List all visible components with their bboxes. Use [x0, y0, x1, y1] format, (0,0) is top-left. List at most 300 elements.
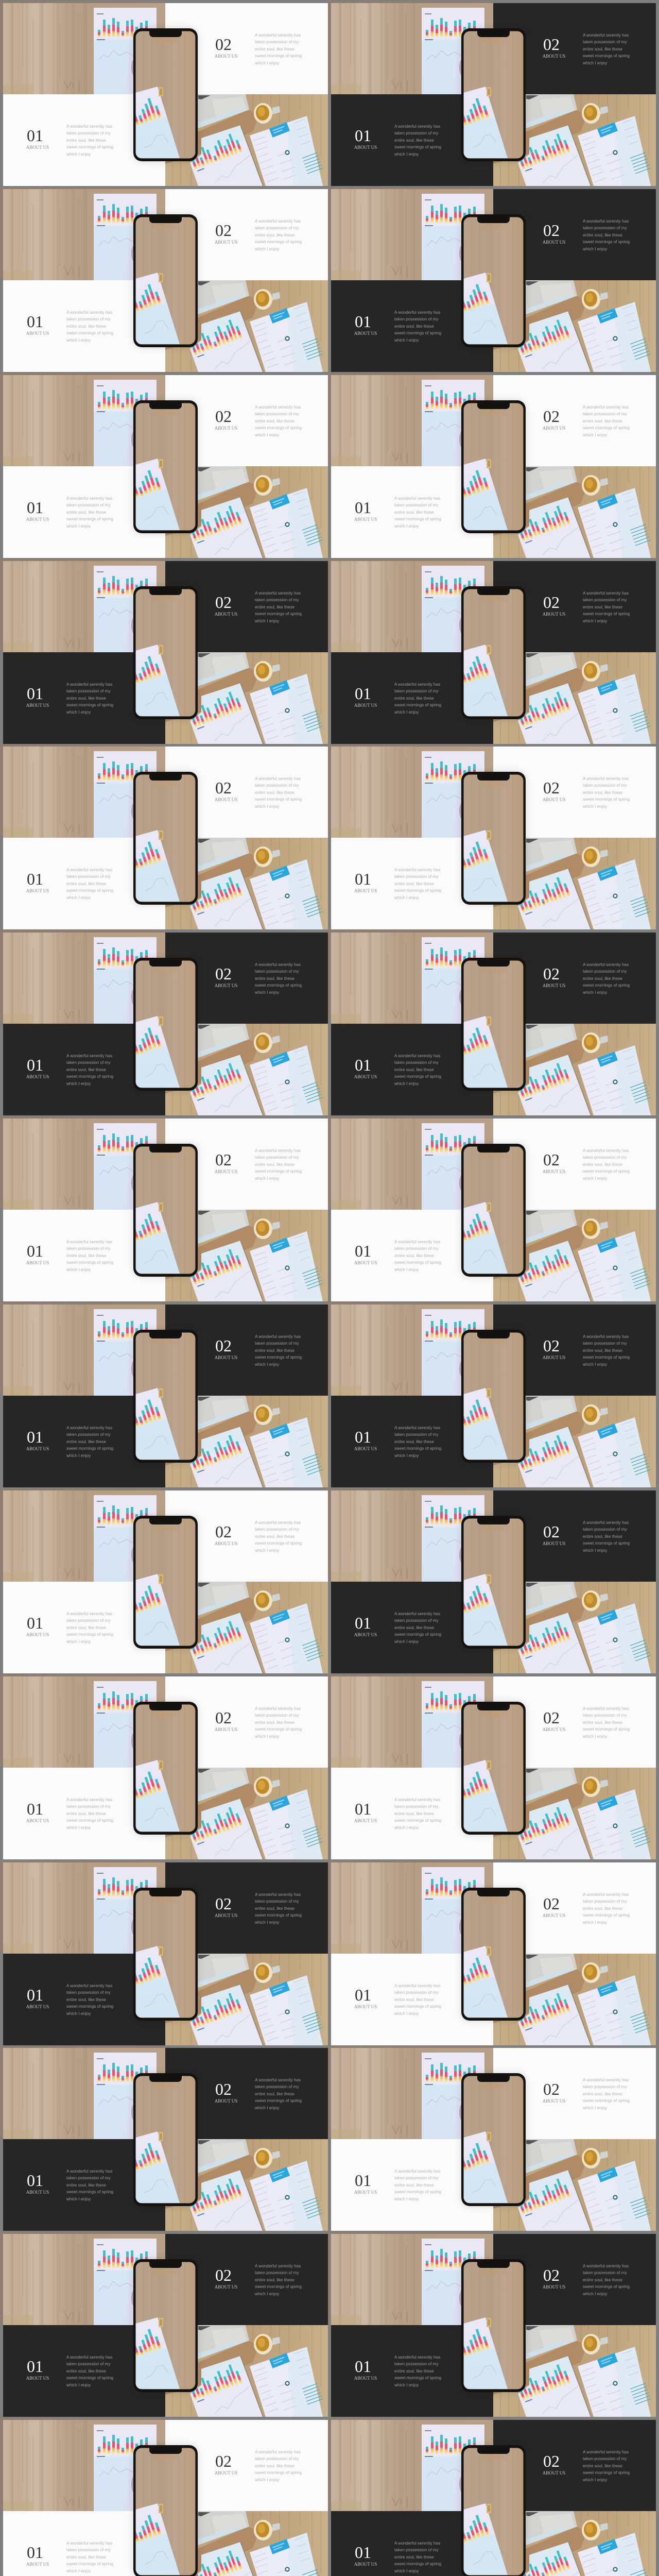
body text: entire soul, like these [583, 605, 622, 609]
number: 01 [27, 1428, 43, 1446]
body text: A wonderful serenity has [583, 405, 629, 410]
photo: desk wood and paper [3, 1118, 165, 1210]
body text: A wonderful serenity has [66, 2169, 112, 2174]
slide row 9 right [331, 1490, 656, 1673]
number: 02 [215, 1336, 232, 1355]
body text: entire soul, like these [394, 324, 434, 329]
body text: taken possession of my [66, 1432, 111, 1437]
label: ABOUT US [354, 2004, 377, 2009]
panel: about us 02 [493, 561, 656, 652]
body text: sweet mornings of spring [394, 1260, 441, 1265]
body text: which I enjoy [66, 2197, 91, 2201]
body text: entire soul, like these [66, 1253, 106, 1258]
body text: entire soul, like these [394, 1439, 434, 1444]
body text: taken possession of my [583, 1899, 627, 1904]
photo: desk laptop coffee papers [165, 1954, 328, 2045]
panel: about us 02 [165, 3, 328, 94]
body text: which I enjoy [255, 2478, 279, 2482]
body text: entire soul, like these [583, 1348, 622, 1353]
body text: sweet mornings of spring [583, 1913, 630, 1918]
body text: sweet mornings of spring [66, 2190, 113, 2194]
phone mockup [461, 1888, 526, 2021]
body text: A wonderful serenity has [583, 1706, 629, 1711]
body text: A wonderful serenity has [394, 2169, 440, 2174]
body text: entire soul, like these [583, 2464, 622, 2468]
body text [66, 310, 113, 343]
label: ABOUT US [543, 612, 565, 617]
photo: desk wood and paper [331, 2048, 493, 2139]
body text: A wonderful serenity has [394, 1798, 440, 1802]
photo: desk laptop coffee papers [493, 2325, 656, 2417]
body text: entire soul, like these [583, 233, 622, 238]
body text: sweet mornings of spring [583, 54, 630, 58]
photo: desk wood and paper [3, 3, 165, 94]
number: 01 [27, 870, 43, 888]
panel: about us 01 [3, 1024, 165, 1115]
body text [583, 2263, 630, 2297]
phone mockup [461, 28, 526, 161]
body text: taken possession of my [66, 2176, 111, 2180]
body text: which I enjoy [394, 1267, 419, 1272]
body text: which I enjoy [255, 804, 279, 809]
photo: desk laptop coffee papers [165, 2325, 328, 2417]
phone mockup [133, 2259, 198, 2392]
number: 02 [543, 1708, 560, 1727]
photo: desk laptop coffee papers [493, 838, 656, 929]
slide row 5 right [331, 747, 656, 929]
body text: sweet mornings of spring [66, 517, 113, 521]
body text: sweet mornings of spring [394, 2562, 441, 2566]
label: ABOUT US [215, 797, 237, 802]
body text: sweet mornings of spring [66, 2376, 113, 2380]
label: ABOUT US [26, 1446, 49, 1451]
phone mockup [133, 958, 198, 1091]
label: ABOUT US [215, 426, 237, 431]
number: 02 [215, 2452, 232, 2470]
body text: A wonderful serenity has [255, 1706, 301, 1711]
label: ABOUT US [543, 2470, 565, 2476]
body text: sweet mornings of spring [394, 2376, 441, 2380]
body text: entire soul, like these [255, 2278, 294, 2282]
body text: which I enjoy [583, 247, 607, 251]
photo: desk wood and paper [3, 1676, 165, 1768]
panel: about us 01 [331, 280, 493, 372]
panel: about us 02 [493, 2234, 656, 2325]
panel: about us 01 [3, 2139, 165, 2231]
photo: desk laptop coffee papers [165, 838, 328, 929]
label: ABOUT US [215, 240, 237, 245]
body text: sweet mornings of spring [66, 2562, 113, 2566]
body text: taken possession of my [583, 2270, 627, 2275]
body text: which I enjoy [394, 710, 419, 715]
panel: about us 02 [165, 747, 328, 838]
phone mockup [133, 214, 198, 347]
panel: about us 02 [493, 1862, 656, 1954]
body text: entire soul, like these [583, 419, 622, 423]
body text: entire soul, like these [583, 1906, 622, 1911]
label: ABOUT US [26, 1074, 49, 1079]
body text: A wonderful serenity has [66, 1240, 112, 1244]
panel: about us 02 [165, 1676, 328, 1768]
body text: entire soul, like these [255, 1906, 294, 1911]
label: ABOUT US [354, 1260, 377, 1265]
number: 01 [355, 684, 371, 703]
label: ABOUT US [543, 240, 565, 245]
body text: entire soul, like these [394, 2555, 434, 2560]
number: 01 [27, 1614, 43, 1632]
body text: which I enjoy [255, 990, 279, 995]
body text: entire soul, like these [394, 1997, 434, 2002]
panel: about us 02 [493, 2420, 656, 2511]
body text: A wonderful serenity has [583, 591, 629, 596]
body text: sweet mornings of spring [255, 797, 302, 802]
body text: taken possession of my [394, 1246, 439, 1251]
number: 02 [543, 221, 560, 240]
label: ABOUT US [215, 1727, 237, 1732]
photo: desk laptop coffee papers [493, 280, 656, 372]
body text [255, 33, 302, 65]
number: 01 [27, 126, 43, 145]
body text: entire soul, like these [255, 976, 294, 981]
number: 01 [27, 1800, 43, 1818]
panel: about us 01 [331, 1396, 493, 1487]
slide row 4 left [0, 559, 328, 744]
body text: taken possession of my [394, 2548, 439, 2552]
photo: desk wood and paper [331, 375, 493, 466]
body text: entire soul, like these [255, 233, 294, 238]
body text: which I enjoy [394, 1453, 419, 1458]
phone mockup [461, 1702, 526, 1835]
label: ABOUT US [543, 1355, 565, 1360]
label: ABOUT US [26, 2004, 49, 2009]
body text: sweet mornings of spring [394, 145, 441, 149]
body text: sweet mornings of spring [255, 1727, 302, 1732]
photo: desk wood and paper [331, 2234, 493, 2325]
body text: A wonderful serenity has [66, 868, 112, 872]
phone mockup [461, 214, 526, 347]
photo: desk wood and paper [331, 1862, 493, 1954]
body text: entire soul, like these [394, 882, 434, 886]
body text: taken possession of my [394, 1804, 439, 1809]
label: ABOUT US [215, 612, 237, 617]
number: 02 [215, 1522, 232, 1541]
body text: A wonderful serenity has [394, 682, 440, 687]
body text: sweet mornings of spring [66, 1074, 113, 1079]
panel: about us 01 [331, 466, 493, 558]
body text: A wonderful serenity has [394, 2541, 440, 2546]
body text: which I enjoy [583, 990, 607, 995]
photo: desk laptop coffee papers [165, 1768, 328, 1859]
body text: A wonderful serenity has [255, 962, 301, 967]
slide row 11 right [331, 1862, 656, 2045]
photo: desk laptop coffee papers [493, 1024, 656, 1115]
label: ABOUT US [354, 1632, 377, 1637]
body text: A wonderful serenity has [66, 2355, 112, 2360]
panel: about us 01 [331, 1024, 493, 1115]
panel: about us 02 [493, 747, 656, 838]
number: 01 [355, 498, 371, 517]
number: 02 [215, 778, 232, 797]
panel: about us 01 [331, 1768, 493, 1859]
body text: entire soul, like these [66, 696, 106, 701]
photo: desk laptop coffee papers [493, 1768, 656, 1859]
photo: desk wood and paper [3, 2234, 165, 2325]
body text [583, 1891, 630, 1926]
body text: taken possession of my [394, 2362, 439, 2366]
body text: A wonderful serenity has [255, 1892, 301, 1897]
panel: about us 02 [493, 3, 656, 94]
body text: sweet mornings of spring [394, 1446, 441, 1451]
body text [255, 1333, 302, 1368]
body text [66, 496, 113, 529]
panel: about us 02 [493, 1304, 656, 1396]
body text: taken possession of my [66, 1618, 111, 1623]
body text: entire soul, like these [583, 47, 622, 52]
body text: sweet mornings of spring [66, 1260, 113, 1265]
body text: taken possession of my [66, 689, 111, 693]
photo: desk wood and paper [331, 1304, 493, 1396]
label: ABOUT US [543, 1541, 565, 1546]
body text: which I enjoy [66, 895, 91, 900]
body text: which I enjoy [66, 1081, 91, 1086]
body text: taken possession of my [255, 1155, 299, 1160]
panel: about us 01 [3, 838, 165, 929]
label: ABOUT US [354, 1074, 377, 1079]
body text: which I enjoy [255, 619, 279, 623]
body text [583, 1333, 630, 1368]
panel: about us 01 [331, 2139, 493, 2231]
body text: taken possession of my [66, 131, 111, 135]
body text: taken possession of my [66, 317, 111, 321]
body text [394, 1053, 441, 1087]
body text: taken possession of my [394, 689, 439, 693]
photo: desk wood and paper [3, 1862, 165, 1954]
body text: entire soul, like these [66, 882, 106, 886]
body text: entire soul, like these [66, 1625, 106, 1630]
body text [66, 1425, 113, 1459]
body text [583, 2449, 630, 2483]
body text: sweet mornings of spring [255, 2098, 302, 2103]
label: ABOUT US [354, 888, 377, 893]
body text: A wonderful serenity has [66, 310, 112, 315]
body text: sweet mornings of spring [66, 1632, 113, 1637]
body text: which I enjoy [394, 152, 419, 157]
body text: which I enjoy [394, 895, 419, 900]
body text [255, 591, 302, 623]
number: 02 [215, 1150, 232, 1169]
number: 02 [543, 2452, 560, 2470]
panel: about us 01 [3, 1954, 165, 2045]
number: 02 [543, 407, 560, 426]
body text: taken possession of my [255, 1527, 299, 1532]
body text: sweet mornings of spring [583, 2470, 630, 2475]
panel: about us 01 [3, 2325, 165, 2417]
panel: about us 02 [165, 1490, 328, 1582]
number: 01 [27, 498, 43, 517]
body text: entire soul, like these [583, 2092, 622, 2096]
body text: which I enjoy [255, 1548, 279, 1553]
panel: about us 01 [331, 1582, 493, 1673]
slide row 8 left [3, 1304, 328, 1487]
photo: desk laptop coffee papers [493, 1396, 656, 1487]
body text [583, 1519, 630, 1554]
body text [394, 496, 441, 529]
body text: sweet mornings of spring [255, 2284, 302, 2289]
phone mockup [133, 772, 198, 905]
body text: entire soul, like these [394, 1625, 434, 1630]
body text [255, 219, 302, 251]
panel: about us 01 [331, 2325, 493, 2417]
body text: taken possession of my [255, 1899, 299, 1904]
body text: A wonderful serenity has [255, 2264, 301, 2268]
body text: A wonderful serenity has [66, 1798, 112, 1802]
body text: which I enjoy [394, 524, 419, 529]
panel: about us 02 [165, 561, 328, 652]
body text [394, 1239, 441, 1273]
panel: about us 01 [3, 280, 165, 372]
slide row 6 left [3, 933, 328, 1115]
body text [583, 590, 630, 624]
body text [394, 867, 441, 901]
slide row 6 right [331, 933, 656, 1115]
label: ABOUT US [215, 2098, 237, 2104]
body text [255, 2077, 302, 2111]
panel: about us 01 [3, 94, 165, 186]
slide row 1 right [328, 1, 656, 186]
photo: desk laptop coffee papers [165, 94, 328, 186]
label: ABOUT US [26, 703, 49, 708]
body text: A wonderful serenity has [583, 776, 629, 781]
panel: about us 02 [165, 2048, 328, 2139]
body text: taken possession of my [66, 1060, 111, 1065]
body text [583, 1705, 630, 1740]
slide row 9 left [3, 1490, 328, 1673]
label: ABOUT US [26, 145, 49, 150]
body text: which I enjoy [66, 152, 91, 157]
label: ABOUT US [543, 426, 565, 431]
label: ABOUT US [354, 2562, 377, 2567]
body text: which I enjoy [583, 2478, 607, 2482]
label: ABOUT US [354, 1446, 377, 1451]
body text: which I enjoy [583, 804, 607, 809]
photo: desk wood and paper [331, 561, 493, 652]
label: ABOUT US [354, 1818, 377, 1823]
number: 01 [355, 312, 371, 331]
body text: sweet mornings of spring [66, 888, 113, 893]
body text [583, 219, 630, 251]
body text: taken possession of my [394, 2176, 439, 2180]
photo: desk wood and paper [3, 1490, 165, 1582]
body text [583, 33, 630, 65]
phone mockup [461, 2445, 526, 2576]
label: ABOUT US [26, 2376, 49, 2381]
phone mockup [133, 28, 198, 161]
body text: sweet mornings of spring [583, 1727, 630, 1732]
label: ABOUT US [215, 1355, 237, 1360]
panel: about us 01 [331, 652, 493, 744]
panel: about us 02 [493, 189, 656, 280]
body text: taken possession of my [394, 874, 439, 879]
label: ABOUT US [543, 1169, 565, 1174]
label: ABOUT US [354, 2376, 377, 2381]
body text: A wonderful serenity has [583, 962, 629, 967]
number: 01 [355, 2357, 371, 2376]
body text: sweet mornings of spring [583, 1355, 630, 1360]
body text: sweet mornings of spring [255, 426, 302, 430]
body text [394, 2168, 441, 2202]
body text: which I enjoy [255, 2106, 279, 2110]
body text: entire soul, like these [66, 2369, 106, 2374]
number: 02 [543, 35, 560, 54]
body text: sweet mornings of spring [66, 145, 113, 149]
body text [66, 2168, 113, 2202]
phone mockup [461, 586, 526, 719]
number: 01 [27, 684, 43, 703]
panel: about us 02 [165, 933, 328, 1024]
number: 02 [215, 593, 232, 612]
body text: entire soul, like these [583, 1720, 622, 1725]
label: ABOUT US [215, 54, 237, 59]
body text [66, 1239, 113, 1273]
body text: A wonderful serenity has [394, 1240, 440, 1244]
body text [394, 310, 441, 343]
body text: sweet mornings of spring [66, 331, 113, 335]
photo: desk laptop coffee papers [165, 1396, 328, 1487]
photo: desk laptop coffee papers [493, 2139, 656, 2231]
body text: sweet mornings of spring [583, 2098, 630, 2103]
phone mockup [133, 1702, 198, 1835]
body text: A wonderful serenity has [394, 1984, 440, 1988]
body text: A wonderful serenity has [66, 1054, 112, 1058]
label: ABOUT US [26, 1260, 49, 1265]
photo: desk laptop coffee papers [493, 1582, 656, 1673]
body text: sweet mornings of spring [394, 2190, 441, 2194]
panel: about us 02 [165, 2234, 328, 2325]
body text: entire soul, like these [66, 1439, 106, 1444]
photo: desk laptop coffee papers [165, 280, 328, 372]
body text: entire soul, like these [394, 1253, 434, 1258]
body text: taken possession of my [394, 503, 439, 507]
body text: taken possession of my [255, 226, 299, 230]
body text: A wonderful serenity has [583, 1520, 629, 1525]
slide row 3 left [0, 373, 328, 558]
panel: about us 02 [493, 933, 656, 1024]
body text: which I enjoy [66, 524, 91, 529]
body text: taken possession of my [394, 317, 439, 321]
panel: about us 01 [331, 1954, 493, 2045]
label: ABOUT US [354, 2190, 377, 2195]
number: 02 [215, 407, 232, 426]
number: 01 [355, 1986, 371, 2004]
body text: which I enjoy [583, 433, 607, 437]
body text: sweet mornings of spring [255, 1169, 302, 1174]
body text: sweet mornings of spring [583, 426, 630, 430]
body text: which I enjoy [255, 61, 279, 65]
body text: entire soul, like these [583, 976, 622, 981]
body text: entire soul, like these [394, 138, 434, 143]
label: ABOUT US [543, 1727, 565, 1732]
body text: which I enjoy [66, 1825, 91, 1830]
panel: about us 01 [331, 838, 493, 929]
label: ABOUT US [215, 2470, 237, 2476]
body text [66, 1053, 113, 1087]
body text: entire soul, like these [66, 2555, 106, 2560]
body text: sweet mornings of spring [66, 703, 113, 707]
number: 02 [215, 2266, 232, 2284]
panel: about us 02 [165, 2420, 328, 2511]
number: 02 [543, 1522, 560, 1541]
number: 01 [27, 1242, 43, 1260]
